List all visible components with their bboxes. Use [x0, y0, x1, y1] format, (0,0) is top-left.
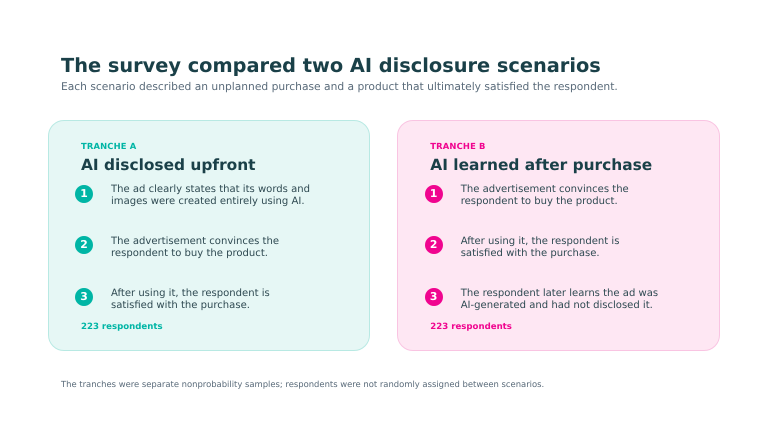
respondent count B: 223 respondents [430, 322, 512, 332]
panel: tranche A [48, 120, 370, 351]
subtitle: Each scenario described an unplanned purchase and a product that ultimately satisfied the respondent. [61, 80, 618, 93]
step 1 text [110, 184, 310, 207]
step 3 badge: 3 [430, 290, 437, 303]
step 1 badge [425, 185, 443, 203]
step 1 text: The ad clearly states that its words and [111, 184, 310, 195]
step 3 text: The respondent later learns the ad was [461, 288, 658, 299]
step 3 text: AI-generated and had not disclosed it. [461, 300, 653, 311]
panel: tranche B [397, 120, 720, 351]
tranche A heading: AI disclosed upfront [81, 156, 256, 174]
step 3 text: satisfied with the purchase. [111, 300, 250, 311]
step 3 badge: 3 [80, 290, 88, 303]
step 2 badge [425, 236, 443, 254]
step 3 text [111, 288, 270, 311]
step 1 text: The advertisement convinces the [461, 184, 629, 195]
step 2 text: respondent to buy the product. [111, 248, 268, 259]
step 3 badge [75, 288, 93, 306]
step 2 text: satisfied with the purchase. [461, 248, 600, 259]
step 1 badge: 1 [80, 187, 88, 200]
tranche A label: TRANCHE A [81, 141, 136, 151]
step 2 badge: 2 [80, 238, 88, 251]
step 1 text: respondent to buy the product. [461, 196, 618, 207]
step 1 text [460, 184, 629, 207]
step 3 text: After using it, the respondent is [111, 288, 270, 299]
step 1 badge: 1 [430, 187, 437, 200]
step 2 text: After using it, the respondent is [461, 236, 619, 247]
step 2 text [460, 236, 619, 259]
step 2 text [110, 236, 279, 259]
tranche B heading: AI learned after purchase [430, 156, 652, 174]
step 2 badge: 2 [430, 238, 437, 251]
step 3 badge [425, 288, 443, 306]
respondent count A: 223 respondents [81, 322, 163, 332]
step 3 text [460, 288, 658, 311]
tranche B label: TRANCHE B [430, 141, 486, 151]
step 2 text: The advertisement convinces the [111, 236, 279, 247]
step 1 badge [75, 185, 93, 203]
title: The survey compared two AI disclosure scenarios [61, 54, 601, 77]
step 2 badge [75, 236, 93, 254]
step 1 text: images were created entirely using AI. [111, 196, 305, 207]
footnote: The tranches were separate nonprobability samples; respondents were not randomly assigned between scenarios. [61, 379, 544, 389]
